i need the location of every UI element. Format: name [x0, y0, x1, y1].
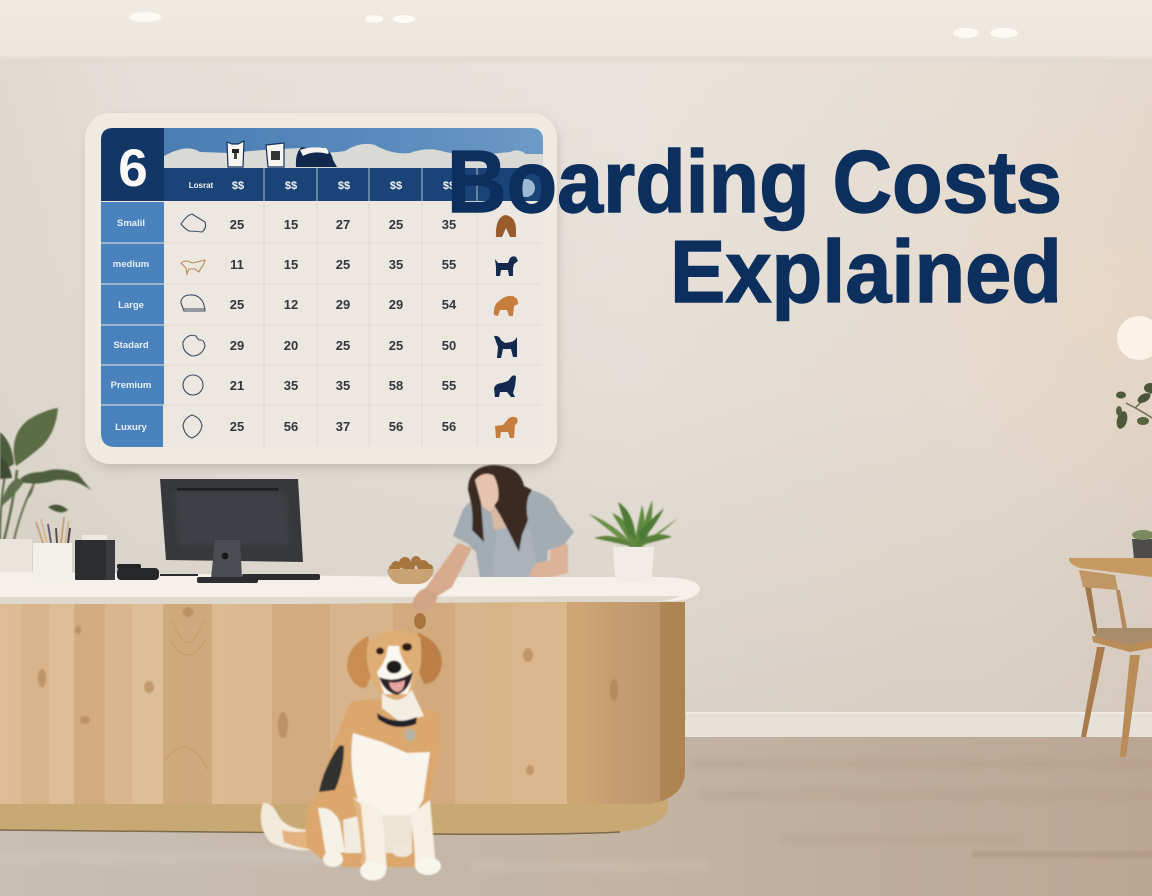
price numbers: 55 [442, 257, 456, 272]
row labels: Smalil [117, 218, 145, 229]
ears [347, 636, 374, 688]
white chest [351, 733, 430, 830]
ceiling lights [129, 12, 1018, 38]
monitor back [160, 479, 320, 583]
price numbers: 25 [336, 338, 350, 353]
price numbers: 29 [336, 297, 350, 312]
table header row: $$ [338, 180, 350, 192]
potted fern [589, 500, 678, 582]
price numbers: 25 [230, 419, 244, 434]
woman behind counter [453, 465, 574, 580]
price numbers: 58 [389, 378, 403, 393]
chair back [1079, 570, 1118, 590]
white haunch [318, 808, 345, 856]
title: Explained [670, 222, 1062, 321]
table header row: Losrat [189, 181, 214, 190]
banner [164, 128, 543, 168]
floor [0, 737, 1152, 896]
front legs [353, 797, 387, 870]
row labels: medium [113, 259, 149, 270]
table header row: $$ [232, 180, 244, 192]
back paws [323, 851, 343, 867]
banner clouds [164, 144, 543, 168]
body [306, 699, 441, 867]
dog breed icons [494, 215, 518, 438]
table top [1069, 558, 1152, 577]
banner icons [227, 141, 337, 167]
title: Boarding Costs [447, 132, 1062, 231]
desk phone device [117, 564, 159, 580]
black patch [319, 745, 344, 792]
number tile [101, 128, 164, 201]
price numbers: 29 [389, 297, 403, 312]
head [367, 630, 421, 700]
price numbers: 25 [230, 217, 244, 232]
white neck ruff [382, 690, 424, 722]
row labels: Large [118, 300, 144, 311]
dog treat [414, 613, 426, 629]
price numbers: 15 [284, 217, 298, 232]
price numbers: 35 [284, 378, 298, 393]
branch plant [1115, 383, 1152, 430]
table header row: $$ [285, 180, 297, 192]
brass plinth [0, 800, 668, 834]
baseboard [686, 712, 1152, 737]
chair legs [1081, 647, 1105, 737]
price numbers: 25 [230, 297, 244, 312]
hair [468, 465, 532, 552]
price numbers: 20 [284, 338, 298, 353]
price numbers: 37 [336, 419, 350, 434]
right forearm and hand [528, 543, 568, 580]
wall price board [85, 113, 558, 468]
row labels: Stadard [113, 340, 149, 351]
left plant pot [0, 539, 32, 573]
price numbers: 29 [230, 338, 244, 353]
title [447, 132, 1062, 321]
pencil cup [33, 517, 72, 580]
chair and table [1069, 558, 1152, 757]
row labels [101, 202, 164, 447]
price numbers: 27 [336, 217, 350, 232]
back fluff [343, 815, 365, 853]
table header row: $$ [443, 180, 455, 192]
dog [261, 630, 442, 880]
number tile: 6 [118, 139, 148, 198]
chair seat [1094, 628, 1152, 650]
price numbers: 54 [442, 297, 457, 312]
price numbers: 56 [389, 419, 403, 434]
row labels: Premium [111, 380, 151, 391]
table header row [164, 168, 543, 201]
treat bowl [387, 556, 434, 584]
table header row: $$ [390, 180, 402, 192]
face [475, 474, 498, 512]
price numbers: 25 [389, 217, 403, 232]
small table pot [1132, 530, 1152, 559]
shirt [453, 490, 574, 578]
price numbers: 35 [389, 257, 403, 272]
price numbers: 56 [284, 419, 298, 434]
price numbers: 21 [230, 378, 244, 393]
left tall plant [0, 408, 91, 540]
neck [490, 505, 510, 530]
price numbers: 12 [284, 297, 298, 312]
collar [377, 713, 417, 727]
counter wood front [0, 600, 690, 834]
row labels: Luxury [115, 422, 148, 433]
price numbers: 55 [442, 378, 456, 393]
price numbers: 56 [442, 419, 456, 434]
price numbers: 25 [336, 257, 350, 272]
price numbers: 11 [230, 257, 244, 272]
price numbers: 35 [442, 217, 456, 232]
wall lamp globe [1117, 316, 1152, 360]
price numbers: 50 [442, 338, 456, 353]
belly [380, 815, 412, 853]
tail [261, 803, 316, 850]
price numbers: 35 [336, 378, 350, 393]
counter top [0, 572, 700, 604]
price numbers: 25 [389, 338, 403, 353]
black document box [75, 535, 115, 580]
price numbers [230, 217, 457, 434]
woman's reaching arm [412, 543, 472, 613]
price numbers: 15 [284, 257, 298, 272]
outline icons [181, 214, 206, 438]
grid lines [164, 201, 540, 447]
